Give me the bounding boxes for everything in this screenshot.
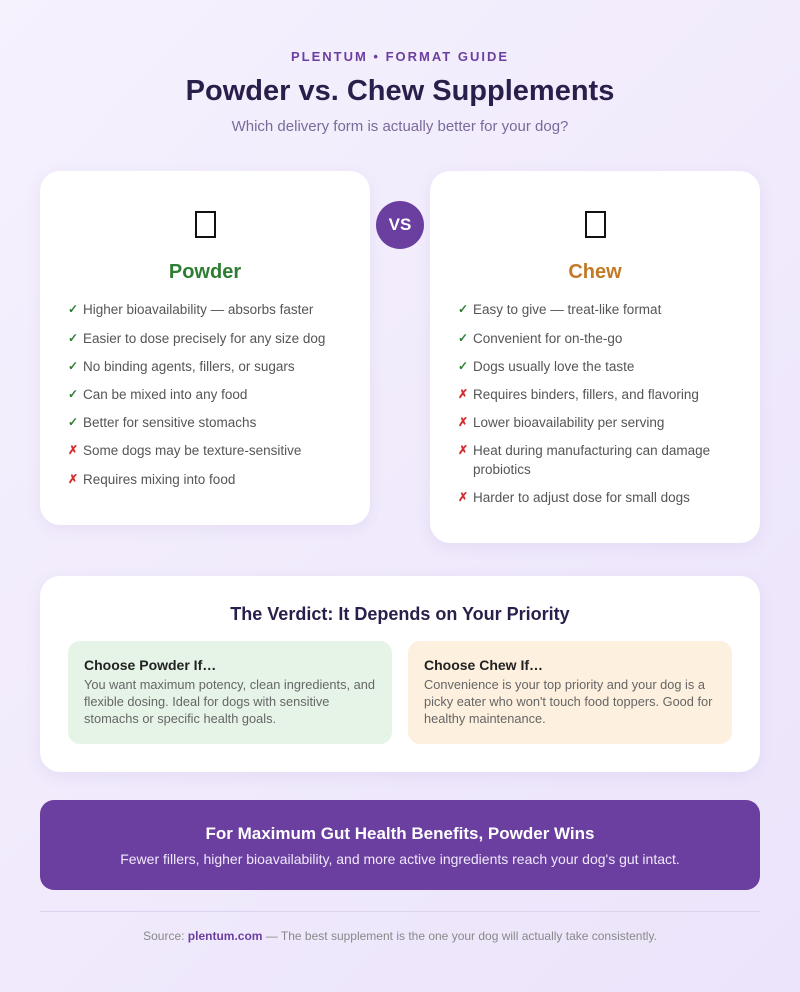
box: choose chew: Choose Chew If… — [424, 657, 543, 673]
list: chew: Dogs usually love the taste — [473, 359, 634, 374]
panel: powder: ✗ — [68, 443, 78, 457]
panel: powder: ✓ — [68, 359, 78, 373]
panel: chew: ✗ — [458, 443, 468, 457]
panel: powder: ✓ — [68, 387, 78, 401]
list: powder: No binding agents, fillers, or sugars — [83, 359, 295, 374]
subtitle: Which delivery form is actually better for your dog? — [232, 118, 568, 135]
box: choose chew: Convenience is your top priority and your dog is a picky eater who won't touch food toppers. Good for healthy maintenance. — [424, 677, 712, 726]
box: choose powder: You want maximum potency, clean ingredients, and flexible dosing. Ideal for dogs with sensitive stomachs or specific health goals. — [84, 677, 375, 726]
list: chew: Easy to give — treat-like format — [473, 302, 661, 317]
panel: powder: ✓ — [68, 302, 78, 316]
panel: chew: ✗ — [458, 490, 468, 504]
panel: powder — [40, 171, 370, 525]
panel: powder: ✓ — [68, 415, 78, 429]
list: powder — [68, 302, 325, 487]
panel: chew: ✓ — [458, 302, 468, 316]
vs badge — [376, 201, 424, 249]
footer: Source: plentum.com — The best supplement is the one your dog will actually take consistently. — [143, 929, 657, 943]
panel: chew — [430, 171, 760, 543]
list: powder: Some dogs may be texture-sensitive — [83, 443, 301, 458]
eyebrow: PLENTUM • FORMAT GUIDE — [291, 49, 509, 64]
verdict heading: The Verdict: It Depends on Your Priority — [230, 604, 570, 624]
list: powder: Better for sensitive stomachs — [83, 415, 256, 430]
panel: chew: ✗ — [458, 387, 468, 401]
panel: powder: ✓ — [68, 331, 78, 345]
banner: Fewer fillers, higher bioavailability, and more active ingredients reach your dog's gut intact. — [120, 851, 680, 867]
box: choose chew — [408, 641, 732, 744]
list: chew — [458, 302, 710, 505]
box: choose powder: Choose Powder If… — [84, 657, 216, 673]
list: powder: Requires mixing into food — [83, 472, 235, 487]
heading: powder: Powder — [169, 261, 241, 283]
icon: chew — [585, 211, 606, 238]
panel: chew: ✓ — [458, 331, 468, 345]
list: chew: Harder to adjust dose for small dogs — [473, 490, 690, 505]
list: chew: Requires binders, fillers, and flavoring — [473, 387, 699, 402]
list: chew: Convenient for on-the-go — [473, 331, 622, 346]
banner: For Maximum Gut Health Benefits, Powder Wins — [205, 824, 594, 843]
list: powder: Easier to dose precisely for any size dog — [83, 331, 325, 346]
list: chew: Heat during manufacturing can damage probiotics — [473, 443, 710, 477]
heading: chew: Chew — [568, 261, 622, 283]
vs badge: VS — [389, 215, 411, 234]
banner — [40, 800, 760, 890]
list: powder: Can be mixed into any food — [83, 387, 247, 402]
list: chew: Lower bioavailability per serving — [473, 415, 664, 430]
panel: verdict — [40, 576, 760, 772]
panel: chew: ✗ — [458, 415, 468, 429]
icon: powder — [195, 211, 216, 238]
box: choose powder — [68, 641, 392, 744]
list: powder: Higher bioavailability — absorbs faster — [83, 302, 313, 317]
title: Powder vs. Chew Supplements — [186, 75, 614, 107]
panel: chew: ✓ — [458, 359, 468, 373]
panel: powder: ✗ — [68, 472, 78, 486]
